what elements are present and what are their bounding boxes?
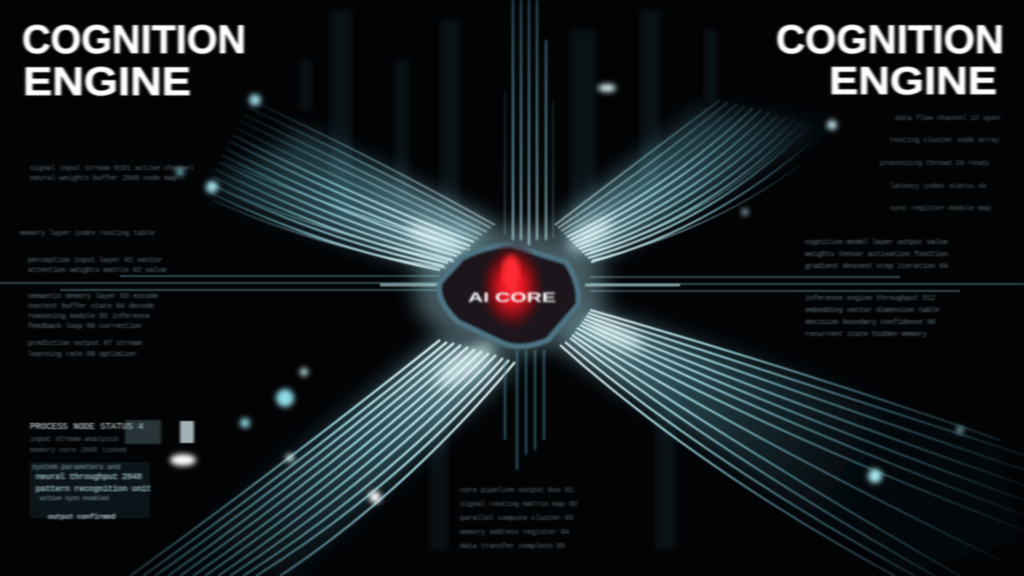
vertical light beam, top bbox=[505, 0, 553, 245]
heading: top right: ENGINE bbox=[829, 60, 997, 103]
data text block: left middle: prediction output 07 stream bbox=[28, 340, 141, 348]
data text block: right middle: embedding vector dimension table bbox=[805, 307, 939, 315]
data text block: right middle: decision boundary confidence 98 bbox=[805, 319, 935, 327]
data text block: right middle: gradient descent step iteration 64 bbox=[805, 263, 948, 271]
core outer halo bbox=[415, 228, 605, 352]
data text block: right upper: routing cluster node array bbox=[890, 137, 999, 145]
beam: upper right bbox=[555, 100, 830, 262]
data text block: left middle: learning rate 08 optimizer bbox=[28, 351, 137, 359]
heading: top left bbox=[22, 18, 246, 104]
data text block: left upper bbox=[20, 165, 194, 238]
red light bbox=[478, 241, 546, 333]
central core bbox=[415, 228, 605, 352]
data text block: left middle: reasoning module 05 inference bbox=[28, 313, 150, 321]
vertical light beam, bottom bbox=[505, 350, 544, 470]
data text block: bottom centre: parallel compute cluster 03 bbox=[460, 515, 573, 523]
beam: upper left bbox=[205, 100, 495, 270]
horizontal light band bbox=[0, 276, 1024, 291]
beam glow underlay bbox=[140, 110, 1024, 576]
core label: AI CORE bbox=[468, 289, 556, 305]
data panel: bottom left: PROCESS NODE STATUS 4 bbox=[30, 422, 143, 432]
data text block: left upper: signal input stream 0101 active channel bbox=[30, 165, 194, 173]
data text block: right middle bbox=[805, 239, 948, 339]
data panel: bottom left: memory core 2048 linked bbox=[30, 447, 127, 455]
data panel: bottom left: system parameters and bbox=[32, 464, 120, 472]
data text block: right upper: data flow channel 12 open bbox=[895, 115, 1000, 123]
data text block: left middle: feedback loop 06 correction bbox=[28, 323, 141, 331]
heading: top left: COGNITION bbox=[22, 18, 246, 62]
data panel: bottom left: input stream analysis bbox=[30, 436, 118, 444]
faint circuit texture bbox=[300, 10, 717, 550]
data text block: right upper: sync register module map bbox=[890, 205, 991, 213]
data text block: right middle: inference engine throughput 512 bbox=[805, 295, 935, 303]
data panel: bottom left bbox=[30, 420, 194, 522]
data text block: left middle: semantic memory layer 03 encode bbox=[28, 293, 158, 301]
data text block: right middle: recurrent state hidden memory bbox=[805, 331, 927, 339]
data text block: bottom centre: signal routing matrix map 02 bbox=[460, 501, 578, 509]
data text block: left middle: perception input layer 01 vector bbox=[28, 257, 162, 265]
beam: lower left bbox=[130, 340, 515, 576]
data text block: left middle: attention weights matrix 02 value bbox=[28, 267, 167, 275]
data text block: bottom centre: core pipeline output bus 01 bbox=[460, 487, 573, 495]
data panel: bottom left: pattern recognition unit bbox=[36, 485, 151, 494]
data text block: bottom centre: memory address register 04 bbox=[460, 529, 569, 537]
data panel: bottom left: neural throughput 2048 bbox=[36, 473, 142, 482]
data text block: right upper bbox=[880, 115, 1000, 213]
data text block: bottom centre bbox=[460, 487, 578, 551]
core casing bbox=[439, 245, 578, 347]
heading: top left: ENGINE bbox=[23, 60, 191, 104]
data text block: left middle: context buffer state 04 decode bbox=[28, 303, 154, 311]
data text block: bottom centre: data transfer complete 05 bbox=[460, 543, 565, 551]
data text block: left upper: neural weights buffer 2048 node map bbox=[30, 175, 177, 183]
beam: lower right bbox=[560, 310, 1024, 576]
data text block: left middle bbox=[28, 257, 167, 359]
bright beam bases bbox=[403, 213, 646, 394]
data panel: bottom left: output confirmed bbox=[48, 514, 115, 522]
heading: top right: COGNITION bbox=[776, 18, 1004, 62]
data panel: bottom left: active sync enabled bbox=[40, 495, 109, 502]
heading: top right bbox=[776, 18, 1004, 103]
data text block: right middle: cognitive model layer output value bbox=[805, 239, 948, 247]
data text block: right upper: latency index status ok bbox=[890, 183, 987, 191]
data text block: left upper: memory layer index routing table bbox=[20, 230, 154, 238]
data text block: right upper: processing thread 24 ready bbox=[880, 160, 989, 168]
data text block: right middle: weights tensor activation function bbox=[805, 251, 948, 259]
glowing sparks bbox=[170, 84, 963, 503]
